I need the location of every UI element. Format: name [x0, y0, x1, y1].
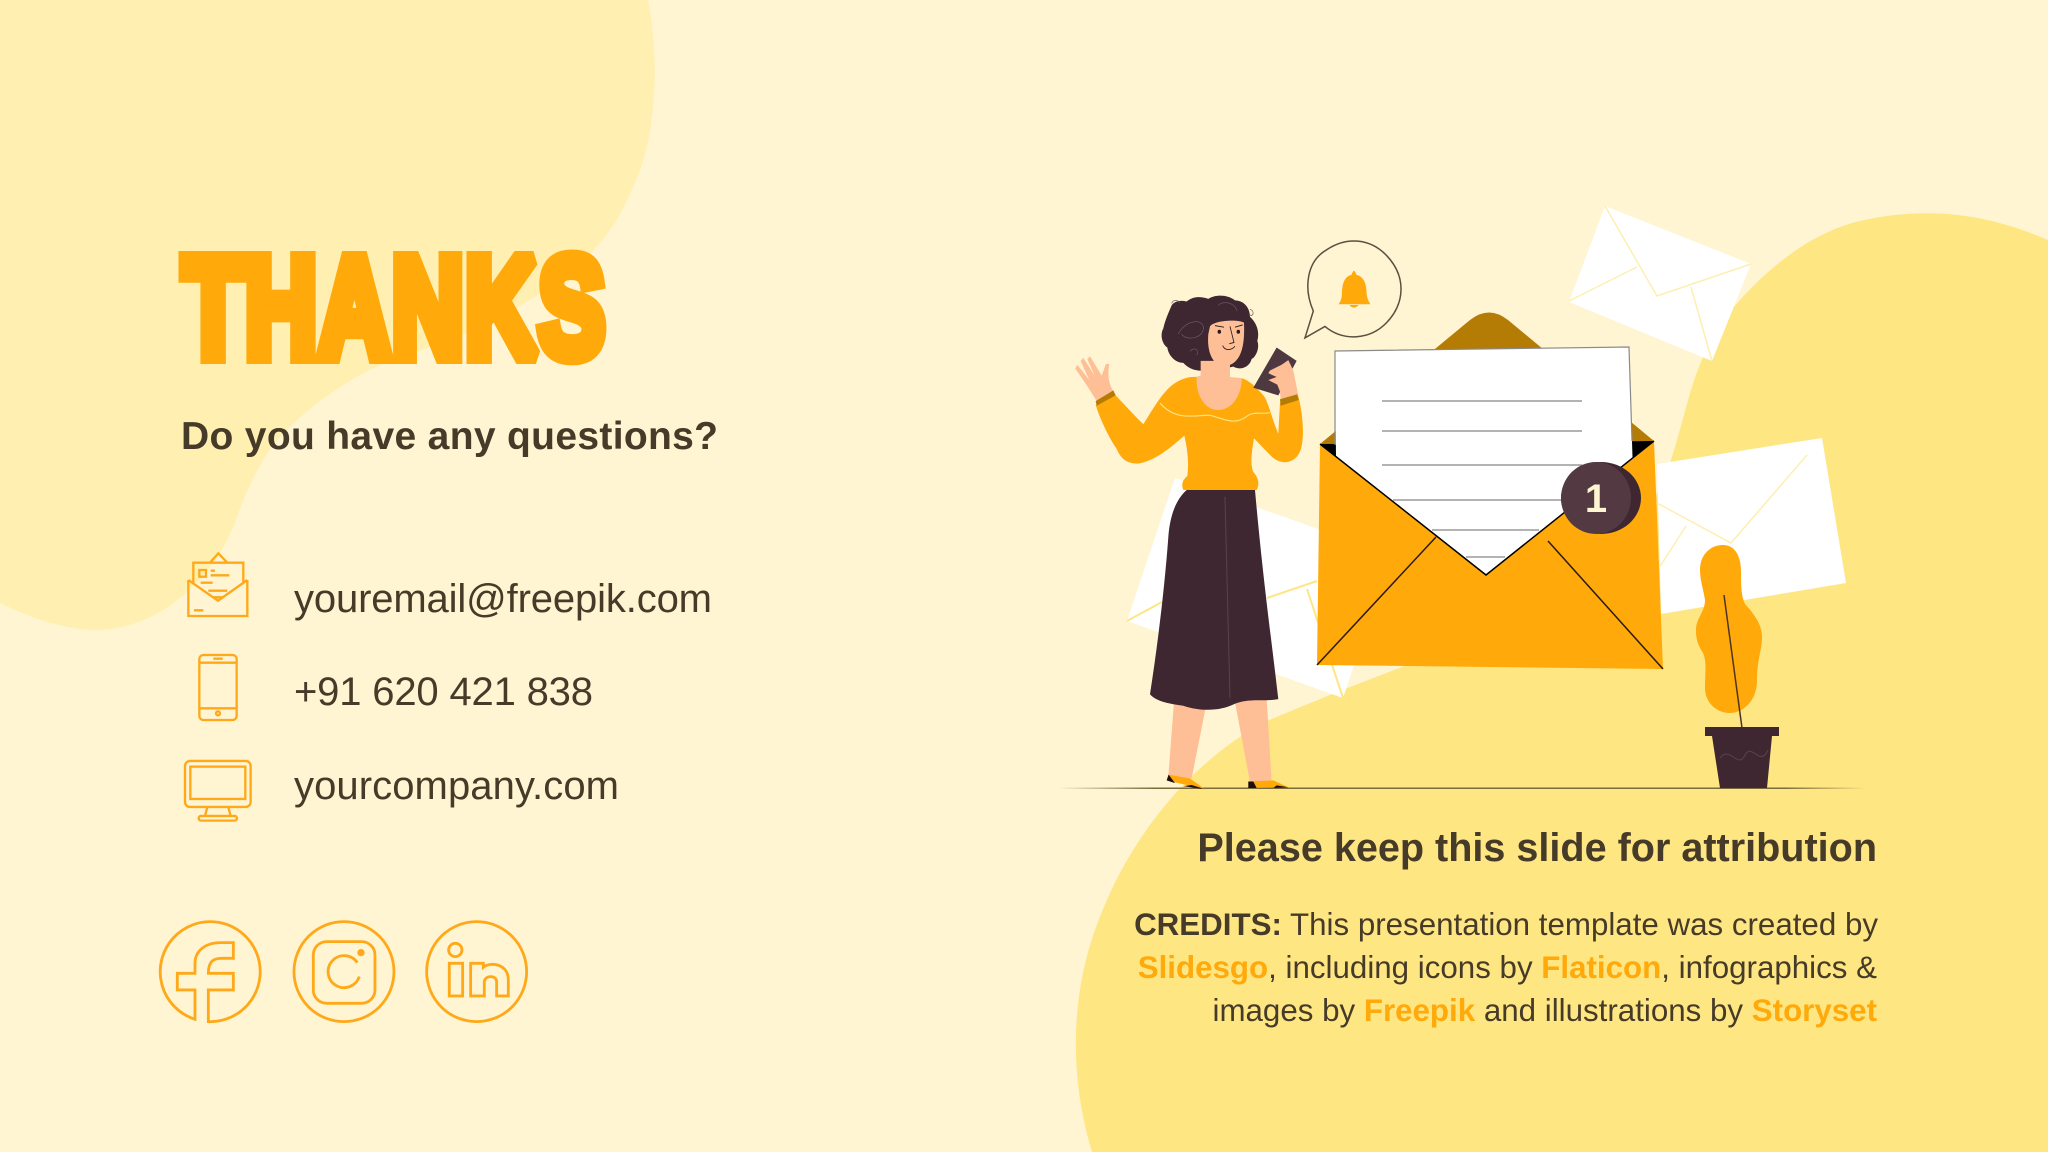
icon: phone — [199, 655, 237, 720]
attribution heading: Please keep this slide for attribution — [1197, 826, 1877, 870]
phone in hand — [1253, 347, 1297, 395]
social icons — [160, 922, 527, 1022]
icon: monitor — [185, 761, 251, 821]
pot — [1705, 727, 1779, 788]
facial features — [1215, 325, 1243, 350]
raised hand — [1075, 356, 1114, 401]
floor line — [1058, 788, 1865, 789]
notification badge — [1561, 462, 1641, 534]
speech bubble with bell — [1305, 241, 1401, 338]
subtitle: Do you have any questions? — [181, 415, 718, 458]
main envelope — [1317, 312, 1663, 669]
text: phone: +91 620 421 838 — [294, 670, 593, 714]
hair curls — [1172, 300, 1253, 355]
icon: facebook — [160, 922, 260, 1022]
potted plant — [1696, 545, 1779, 788]
legs — [1168, 698, 1272, 782]
envelope front — [1317, 441, 1663, 669]
background blob: bottom right — [1076, 213, 2048, 1152]
background blob: top left — [0, 0, 655, 630]
white envelope: right — [1657, 438, 1846, 614]
icon: instagram — [294, 922, 394, 1022]
shirt — [1096, 377, 1303, 490]
hair — [1162, 296, 1258, 371]
neck and face — [1196, 361, 1242, 410]
credits text: Slidesgo, including icons by Flaticon, infographics & — [1138, 950, 1877, 985]
credits text — [1134, 907, 1878, 1028]
back flap — [1320, 312, 1654, 444]
cuffs — [1096, 390, 1299, 406]
credits text: images by Freepik and illustrations by Storyset — [1212, 993, 1878, 1028]
contact list — [185, 553, 712, 821]
title: THANKS — [183, 229, 607, 386]
white envelope: left — [1127, 478, 1391, 698]
icon: linkedin — [427, 922, 527, 1022]
envelope interior — [1320, 441, 1654, 575]
text: website: yourcompany.com — [294, 764, 619, 808]
text: email: youremail@freepik.com — [294, 577, 712, 621]
shoes — [1167, 775, 1288, 789]
leaf — [1696, 545, 1762, 713]
skirt — [1150, 490, 1278, 710]
notification badge: 1 — [1585, 477, 1607, 521]
icon: email — [188, 553, 247, 616]
letter paper — [1335, 347, 1633, 575]
credits text: CREDITS: This presentation template was created by — [1134, 907, 1878, 942]
white envelope: top right — [1569, 206, 1751, 361]
woman character — [1075, 296, 1303, 789]
